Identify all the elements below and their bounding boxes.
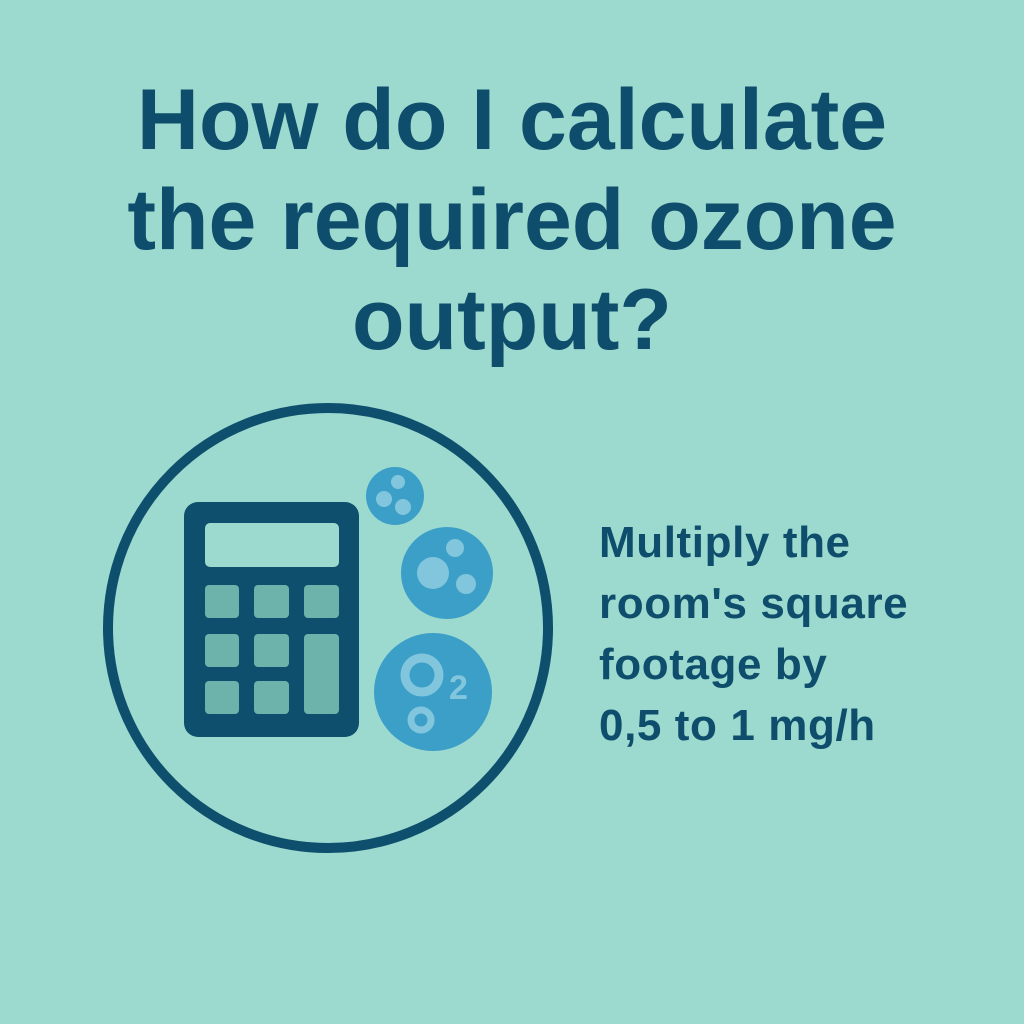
- text block: instruction: footage by: [599, 640, 827, 689]
- title: output?: [352, 272, 672, 368]
- calculator: [184, 502, 359, 737]
- text block: instruction: [599, 518, 908, 750]
- bubble small: [366, 467, 424, 525]
- title: How do I calculate: [137, 72, 887, 168]
- title: [127, 72, 897, 368]
- text block: instruction: 0,5 to 1 mg/h: [599, 701, 876, 750]
- bubble medium: [401, 527, 493, 619]
- title: the required ozone: [127, 172, 897, 268]
- text block: instruction: room's square: [599, 579, 908, 628]
- bubble O2: [374, 633, 492, 751]
- text block: instruction: Multiply the: [599, 518, 851, 567]
- bubble O2: 2: [449, 669, 468, 707]
- ring: [108, 408, 548, 848]
